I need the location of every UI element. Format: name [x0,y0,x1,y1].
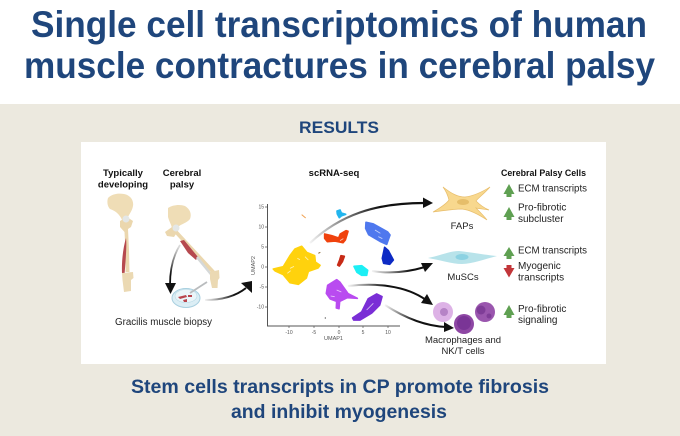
axis tick labels: 5 [362,330,365,336]
title: Single cell transcriptomics of human [31,4,647,45]
heading: scRNA-seq: scRNA-seq [309,168,360,179]
arrow: to macrophages [348,285,433,305]
heading: results: RESULTS [299,118,379,137]
icon: FAP cell [433,187,490,220]
axis tick labels: -10 [285,330,293,336]
icon: MuSC cell [428,251,497,264]
list: immune findings: signaling [518,315,557,326]
conclusion text: and inhibit myogenesis [231,401,447,423]
title [24,4,655,86]
label: macrophages and NK/T cells: Macrophages and [425,335,501,346]
axis tick labels: 0 [338,330,341,336]
arrow: muscle to biopsy [165,245,180,294]
arrow: to FAPs [310,198,433,243]
list: FAP findings: subcluster [518,214,564,225]
list: FAP findings [504,184,587,225]
arrow: biopsy to scrna-seq [205,281,252,300]
label: typically developing: Typically [103,168,144,179]
axis tick labels: 15 [258,204,264,210]
label: cerebral palsy: palsy [170,180,195,190]
panel: results figure [81,142,606,364]
chart: UMAP scatter: UMAP2 [251,256,257,275]
title: muscle contractures in cerebral palsy [24,45,655,86]
axis tick labels: -10 [257,304,264,310]
icon: NK cell [475,302,495,322]
axis tick labels [257,204,391,336]
icon: typically developing leg [107,194,134,292]
list: MuSC findings: transcripts [518,272,564,284]
label: cerebral palsy: Cerebral [163,168,201,179]
axis tick labels: 5 [261,244,264,250]
background band [0,104,680,436]
list: immune findings: Pro-fibrotic [518,304,566,315]
icon: macrophage cell [433,302,453,322]
label: typically developing: developing [98,180,148,190]
conclusion text: Stem cells transcripts in CP promote fibrosis [131,376,549,398]
list: MuSC findings: Myogenic [518,261,561,272]
list: immune findings [504,304,566,326]
axis titles: UMAP1 [324,336,343,342]
axis tick labels: 10 [258,224,264,230]
axes [268,204,400,326]
icon: T cell [454,314,474,334]
list: MuSC findings [504,246,587,284]
list: FAP findings: Pro-fibrotic [518,202,566,214]
label: MuSCs: MuSCs [447,272,479,283]
axis tick labels: -5 [312,330,316,336]
arrow: to MuSCs [372,263,433,272]
axis tick labels: 0 [261,264,264,270]
arrow: to NK/T cells [385,305,454,332]
heading: cerebral palsy cells: Cerebral Palsy Cells [501,168,586,179]
clusters [273,210,393,320]
label: FAPs: FAPs [451,221,474,232]
conclusion text [131,376,549,423]
axis tick labels: 10 [385,330,391,336]
list: MuSC findings: ECM transcripts [518,246,587,256]
icon: petri dish [172,282,207,308]
label: macrophages and NK/T cells: NK/T cells [441,346,485,357]
list: FAP findings: ECM transcripts [518,184,587,194]
label: gracilis muscle biopsy: Gracilis muscle biopsy [115,317,212,328]
icon: cerebral palsy leg [165,205,220,288]
chart: UMAP scatter [251,204,400,342]
axis tick labels: -5 [260,284,264,290]
speckles [287,230,382,310]
